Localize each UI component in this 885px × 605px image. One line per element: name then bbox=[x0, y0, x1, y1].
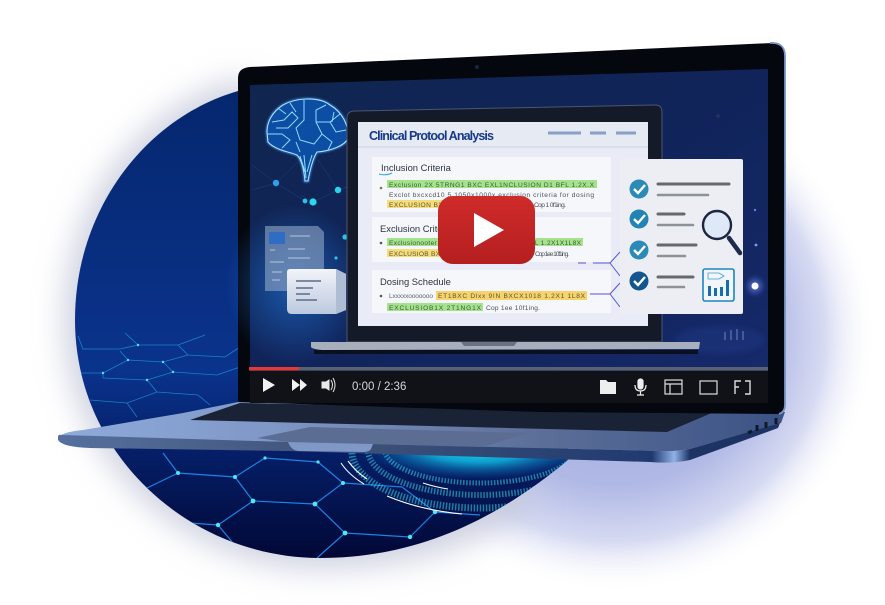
inner laptop base bbox=[311, 342, 700, 354]
webcam bbox=[475, 65, 479, 69]
icon: fullscreen bbox=[735, 381, 750, 394]
icon: theater view bbox=[665, 380, 682, 394]
window toolbar dashes bbox=[548, 132, 636, 134]
play button bbox=[438, 196, 535, 264]
icon: volume bbox=[322, 378, 335, 392]
card: dosing schedule: ET1BXC Dlxx 9IN BXCX1018 1.2X1 1L8X bbox=[438, 293, 586, 300]
icon: fast forward bbox=[292, 379, 307, 391]
inner document window bbox=[358, 122, 648, 326]
inner laptop lid bbox=[347, 105, 662, 342]
connector lines bbox=[578, 252, 620, 307]
background glow right bbox=[353, 77, 877, 593]
dark blue blob with hexagon network bbox=[75, 91, 568, 558]
laptop lid bbox=[238, 43, 785, 414]
network nodes bbox=[273, 180, 348, 260]
lid notch bbox=[288, 442, 373, 452]
trackpad bbox=[257, 427, 527, 447]
checklist card bbox=[620, 159, 743, 314]
upper hexagon mesh bbox=[78, 333, 240, 417]
base top deck bbox=[60, 402, 785, 451]
side ports bbox=[748, 418, 776, 433]
text lines bbox=[658, 184, 729, 277]
lower hexagon mesh bbox=[147, 453, 480, 558]
progress played bbox=[249, 367, 299, 370]
video control bar bbox=[249, 367, 768, 403]
time label: 0:00 / 2:36 bbox=[352, 381, 406, 393]
lid rim bbox=[770, 43, 785, 414]
icon: play bbox=[263, 378, 275, 392]
card: inclusion criteria bbox=[372, 157, 611, 212]
video screen bbox=[225, 69, 768, 372]
chart bars faint bbox=[725, 329, 743, 340]
background glow left bbox=[75, 91, 520, 558]
brain icon bbox=[267, 99, 348, 181]
lower-left blue glow bbox=[225, 205, 365, 365]
keyboard bbox=[190, 403, 714, 432]
right starfield bbox=[675, 114, 765, 354]
card: exclusion criteria: Exclusionooter 5 1 TRNG1 BXC EXL1 D1 BFL 1.2X1X1L8X bbox=[389, 240, 582, 247]
icon: folder bbox=[600, 380, 616, 394]
base front edge bbox=[58, 423, 780, 463]
floating document cards bbox=[265, 226, 346, 314]
card: exclusion criteria bbox=[372, 217, 611, 262]
check items bbox=[630, 180, 648, 290]
card: inclusion criteria: Exclot bxcxcd10 5 1050x1000x exclusion criteria for dosing bbox=[389, 192, 594, 199]
icon: bar chart bbox=[703, 269, 734, 301]
card: dosing schedule bbox=[372, 270, 611, 313]
icon: microphone bbox=[635, 379, 646, 395]
card: exclusion criteria: Cop 1ee 10f1ing. bbox=[535, 251, 569, 258]
cyan radial data dial bbox=[340, 446, 568, 514]
card: inclusion criteria: EXCLUSION BXCX bbox=[389, 202, 454, 209]
card: exclusion criteria: EXCLUSIOB BXC bbox=[389, 251, 445, 258]
icon: magnifying glass bbox=[703, 211, 740, 253]
progress track bbox=[249, 367, 768, 370]
card: inclusion criteria: Cop 1 0f1ing. bbox=[534, 202, 566, 209]
card: dosing schedule: Cop 1ee 10f1ing. bbox=[486, 305, 540, 312]
document title: Clinical Protool Analysis bbox=[369, 129, 494, 143]
mesh nodes bbox=[102, 344, 437, 539]
icon: mini player bbox=[700, 381, 717, 394]
card: exclusion criteria: Exclusion Criter bbox=[380, 223, 446, 234]
laptop base bbox=[58, 402, 785, 463]
network lines bbox=[252, 160, 347, 202]
card: dosing schedule: Lxxxxxooooooo bbox=[389, 293, 433, 300]
card: inclusion criteria: Inclusion Criteria bbox=[381, 162, 452, 173]
card: dosing schedule: Dosing Schedule bbox=[380, 276, 451, 287]
card: dosing schedule: EXCLUSIOB1X 2T1NG1X bbox=[389, 305, 482, 312]
card: inclusion criteria: Exclusion 2X 5TRNG1 BXC EXL1NCLUSION D1 BFL 1.2X.X bbox=[389, 182, 595, 189]
horizon glow bbox=[252, 316, 345, 318]
